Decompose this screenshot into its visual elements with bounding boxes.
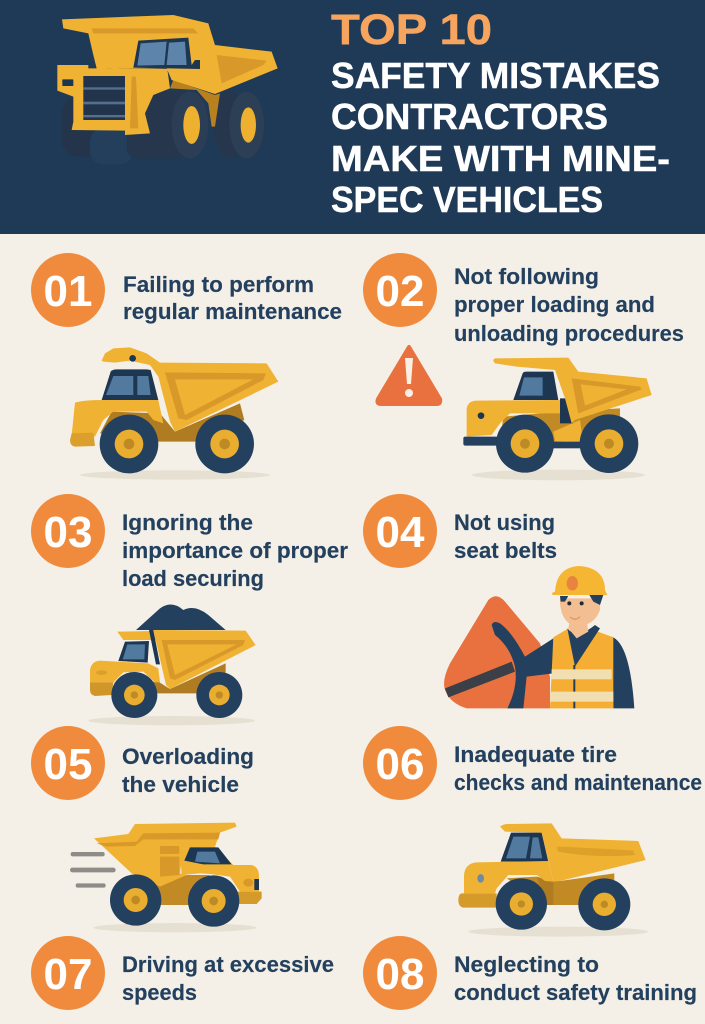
heading 05 <box>122 744 254 797</box>
heading 03: Ignoring the <box>122 510 253 535</box>
item 04 <box>363 494 634 708</box>
item 03 <box>31 494 348 725</box>
truck 02 <box>463 358 652 480</box>
item 06 <box>363 726 702 937</box>
heading 02 <box>454 264 684 346</box>
header banner <box>0 0 705 234</box>
heading 03 <box>122 510 348 591</box>
heading 08 <box>454 952 697 1005</box>
hero mining dump truck <box>57 15 278 164</box>
heading 01 <box>123 272 342 324</box>
title: TOP 10 <box>331 6 492 54</box>
heading 03: importance of proper <box>122 538 348 563</box>
title: SPEC VEHICLES <box>331 179 603 220</box>
heading 02: Not following <box>454 264 599 289</box>
number badge 03 <box>31 494 105 568</box>
truck 03 with load <box>88 605 256 725</box>
number badge 08: 08 <box>376 950 424 999</box>
truck with speed lines <box>70 823 262 932</box>
speed lines <box>70 852 116 888</box>
item 08 <box>363 936 697 1010</box>
title <box>331 6 670 220</box>
number badge 07: 07 <box>44 950 92 999</box>
heading 02: unloading procedures <box>454 321 684 346</box>
number badge 05: 05 <box>44 740 92 789</box>
heading 07 <box>122 952 334 1005</box>
title: MAKE WITH MINE- <box>331 138 670 179</box>
item 01 <box>31 253 342 480</box>
number badge 06: 06 <box>376 740 424 789</box>
heading 06: Inadequate tire <box>454 742 617 767</box>
number badge 05 <box>31 726 105 800</box>
heading 08: Neglecting to <box>454 952 599 977</box>
number badge 07 <box>31 936 105 1010</box>
item 05 <box>31 726 262 932</box>
heading 04 <box>454 510 557 563</box>
heading 05: the vehicle <box>122 772 239 797</box>
worker in hard hat and vest by seat <box>444 566 634 708</box>
item 07 <box>31 936 334 1010</box>
heading 03: load securing <box>122 566 264 591</box>
number badge 04: 04 <box>376 508 425 557</box>
heading 05: Overloading <box>122 744 254 769</box>
heading 08: conduct safety training <box>454 980 697 1005</box>
number badge 03: 03 <box>44 508 92 557</box>
heading 01: Failing to perform <box>123 272 314 297</box>
heading 04: seat belts <box>454 538 557 563</box>
number badge 01: 01 <box>44 267 92 316</box>
heading 07: Driving at excessive <box>122 952 334 977</box>
title: CONTRACTORS <box>331 96 608 137</box>
truck 06 <box>458 823 648 937</box>
number badge 06 <box>363 726 437 800</box>
heading 01: regular maintenance <box>123 299 342 324</box>
number badge 02: 02 <box>376 267 424 316</box>
number badge 08 <box>363 936 437 1010</box>
number badge 04 <box>363 494 437 568</box>
heading 06 <box>454 742 702 795</box>
icon: warning triangle <box>377 347 440 404</box>
heading 07: speeds <box>122 980 197 1005</box>
item 02 <box>363 253 684 480</box>
title: SAFETY MISTAKES <box>331 55 660 96</box>
number badge 02 <box>363 253 437 327</box>
truck 01 with raised hood <box>70 347 278 480</box>
heading 02: proper loading and <box>454 292 655 317</box>
heading 04: Not using <box>454 510 555 535</box>
number badge 01 <box>31 253 105 327</box>
